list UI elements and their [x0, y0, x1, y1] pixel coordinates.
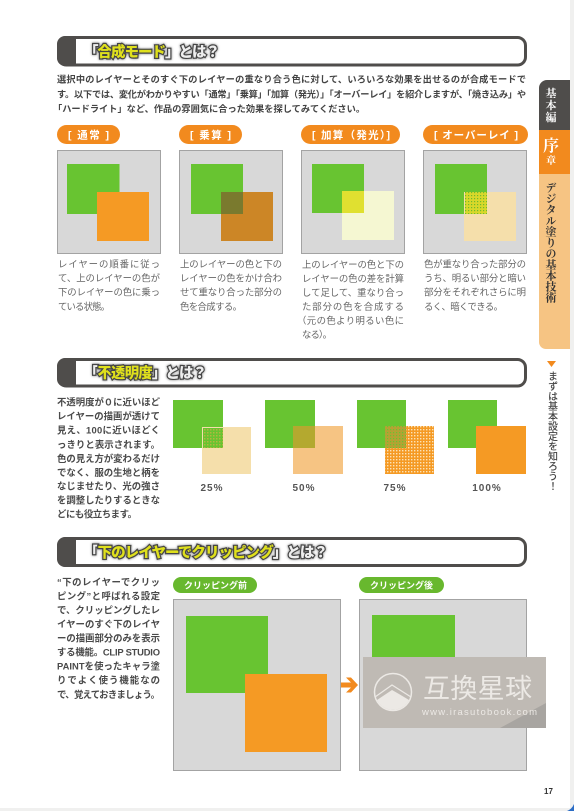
section heading: blend modes: 「合成モード」とは？ [84, 43, 220, 61]
side tab: デジタル塗りの基本技術 [543, 182, 559, 304]
panel: multiply mode: せて重なり合った部分の [180, 286, 282, 298]
section heading: opacity [57, 358, 526, 387]
corner mark [567, 804, 574, 811]
intro text: 選択中のレイヤーとそのすぐ下のレイヤーの重なり合う色に対して、いろいろな効果を出せるのが合成モードで [57, 74, 526, 84]
clipping text: する機能。CLIP STUDIO [57, 646, 160, 658]
opacity sample 75% [357, 400, 434, 494]
opacity sample 100% [448, 400, 526, 494]
opacity text: なじませたり、光の強さ [57, 480, 160, 492]
panel: multiply mode: レイヤーの色をかけ合わ [180, 272, 282, 284]
panel: multiply mode: [ 乗算 ] [190, 128, 231, 142]
panel: multiply mode: 上のレイヤーの色と下の [180, 258, 282, 270]
arrow [341, 678, 358, 692]
panel: overlay mode: うち、明るい部分と暗い [424, 272, 526, 284]
opacity text: っきりと表示されます。 [57, 439, 160, 450]
clipping text: イヤーのすぐ下のレイヤ [57, 618, 160, 630]
opacity text: レイヤーの描画が透けて [57, 410, 160, 422]
side tab: 編 [546, 109, 556, 125]
clipping text: りでよく使う機能なの [57, 674, 160, 686]
intro text: す。以下では、変化がわかりやすい「通常」「乗算」「加算（発光）」「オーバーレイ」を紹介しますが、「焼き込み」や [57, 88, 526, 100]
panel: add glow mode [297, 125, 404, 340]
panel: add glow mode: なる）。 [302, 329, 332, 340]
section heading: opacity: 「不透明度」とは？ [84, 364, 207, 382]
panel: before clipping [173, 577, 340, 770]
panel: before clipping: クリッピング前 [184, 580, 247, 590]
panel: overlay mode: るく、暗くできる。 [424, 301, 503, 312]
opacity sample 25% [173, 400, 251, 494]
panel: overlay mode: 色が重なり合った部分の [424, 258, 526, 270]
side tab: 序 [543, 133, 559, 156]
watermark: www.irasutobook.com [421, 707, 537, 718]
opacity sample 50% [265, 400, 343, 494]
opacity text: 見え、100に近いほどく [57, 424, 160, 436]
opacity sample 75%: 75% [383, 483, 407, 494]
opacity text: どにも役立ちます。 [57, 508, 137, 520]
panel: multiply mode: 色を合成する。 [180, 301, 242, 312]
panel: add glow mode: 上のレイヤーの色と下の [302, 259, 404, 270]
intro text: 「ハードライト」など、作品の雰囲気に合った効果を探してみてください。 [53, 103, 365, 114]
clipping text: PAINTを使ったキャラ塗 [57, 660, 161, 672]
page number: 17 [544, 787, 553, 796]
side tab: 本 [546, 97, 556, 113]
side tab: 基 [546, 85, 556, 101]
side note: まずは基本設定を知ろう！ [546, 371, 558, 491]
panel: overlay mode: 部分をそれぞれさらに明 [424, 286, 526, 298]
panel: overlay mode: [ オーバーレイ ] [434, 130, 518, 142]
section heading: clipping: 「下のレイヤーでクリッピング」とは？ [84, 544, 328, 562]
panel: normal mode: ている状態。 [58, 301, 110, 312]
intro text [53, 74, 526, 114]
clipping text: ピング”と呼ばれる設定 [57, 590, 161, 602]
section heading: clipping [57, 537, 526, 567]
side tab [539, 80, 570, 349]
clipping text: で、覚えておきましょう。 [57, 689, 160, 700]
panel: after clipping: クリッピング後 [370, 580, 433, 590]
panel: overlay mode [423, 125, 528, 312]
panel: add glow mode: [ 加算（発光）] [312, 128, 390, 142]
panel: add glow mode: （元の色より明るい色に [297, 315, 404, 326]
opacity sample 100%: 100% [472, 483, 502, 494]
clipping text [57, 576, 161, 700]
panel: add glow mode: して足して、重なり合っ [302, 287, 404, 298]
side tab: 章 [546, 152, 556, 167]
panel: add glow mode: レイヤーの色の差を計算 [302, 273, 404, 284]
opacity text: を調整したりするときな [57, 494, 160, 506]
panel: normal mode [57, 125, 161, 312]
opacity text: でなく、服の生地と柄を [57, 467, 160, 478]
section heading: blend modes [57, 36, 526, 66]
opacity sample 50%: 50% [292, 483, 316, 494]
watermark: 互換星球 [423, 674, 532, 704]
opacity text [57, 396, 161, 520]
opacity text: 不透明度が０に近いほど [57, 396, 161, 408]
panel: add glow mode: た部分の色を合成する [302, 301, 404, 312]
panel: normal mode: [ 通常 ] [68, 128, 109, 142]
opacity sample 25%: 25% [200, 483, 224, 494]
opacity text: 色の見え方が変わるだけ [57, 453, 160, 464]
panel: normal mode: て、上のレイヤーの色が [58, 272, 161, 284]
panel: multiply mode [179, 125, 282, 312]
panel: after clipping [359, 577, 526, 770]
watermark [363, 657, 546, 728]
clipping text: ーの描画部分のみを表示 [57, 632, 160, 644]
panel: normal mode: レイヤーの順番に従っ [58, 258, 160, 270]
clipping text: “下のレイヤーでクリッ [57, 576, 160, 588]
clipping text: で、クリッピングしたレ [57, 604, 160, 616]
panel: normal mode: 下のレイヤーの色に乗っ [58, 286, 160, 298]
